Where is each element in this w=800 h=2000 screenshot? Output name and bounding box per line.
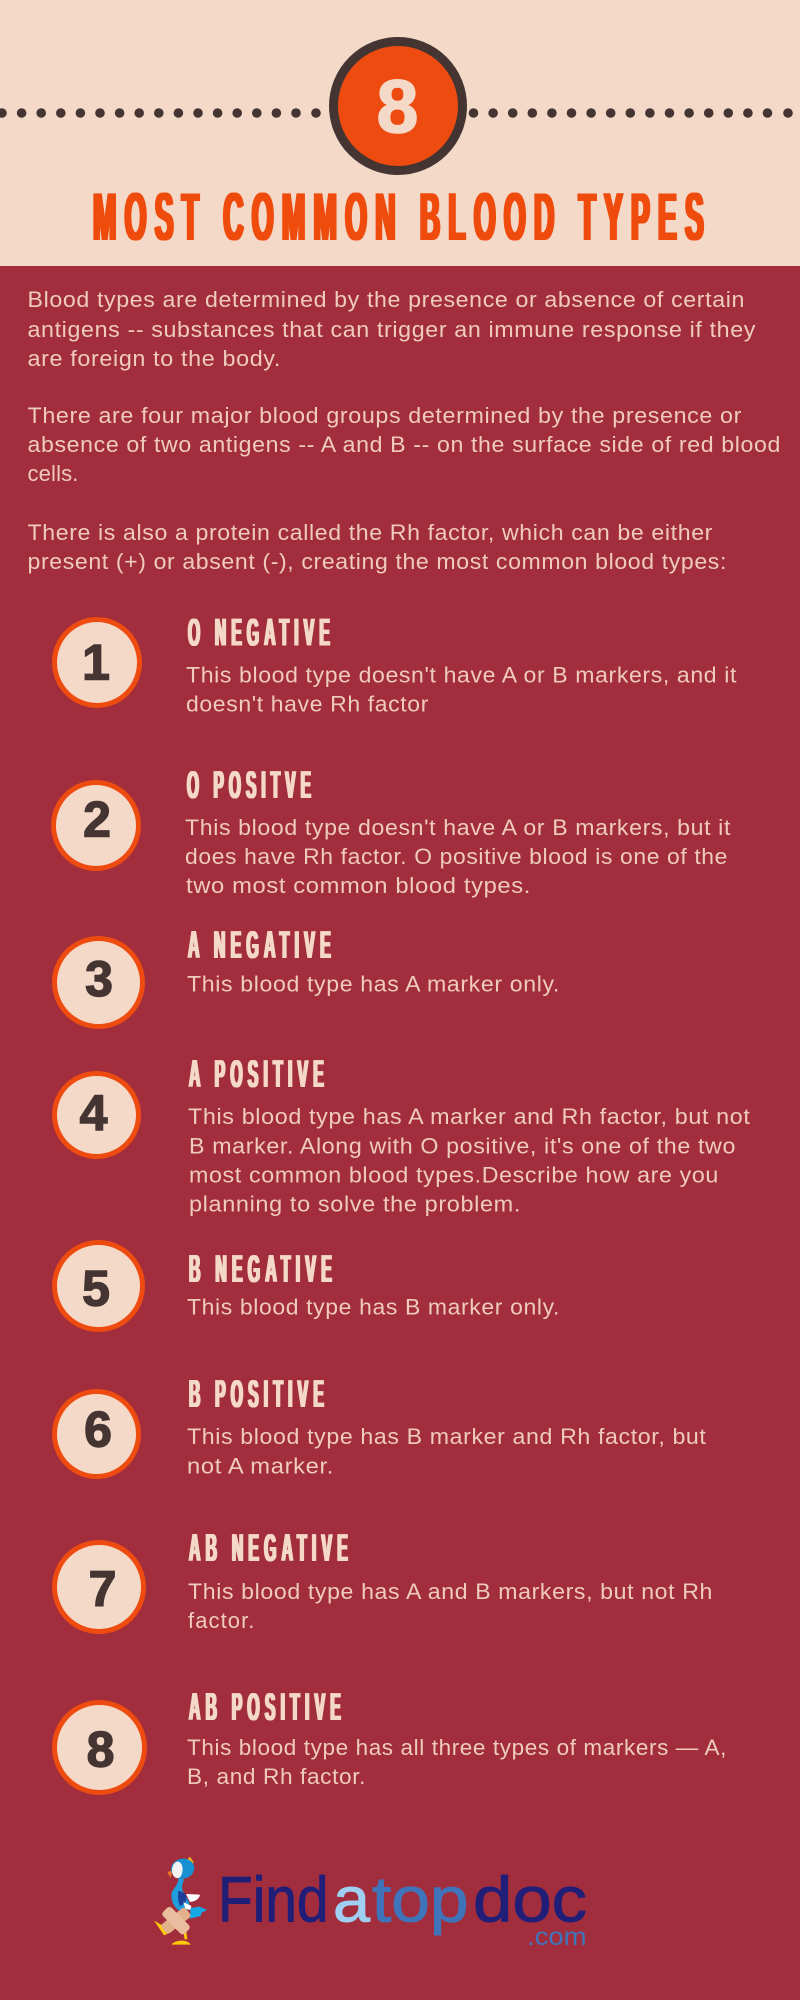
description: [185, 815, 731, 898]
wordmark: Find: [218, 1864, 328, 1936]
description: This blood type has A marker and Rh factor, but not: [188, 1104, 750, 1129]
text block: intro paragraph 2: cells.: [28, 461, 79, 486]
number badge 4: [54, 1074, 138, 1156]
text block: intro paragraph 2: [28, 403, 781, 486]
blood type 5: B negative: B NEGATIVE: [189, 1248, 337, 1291]
text block: intro paragraph 1: antigens -- substances that can trigger an immune response if they: [28, 317, 756, 342]
number badge 6: 6: [84, 1402, 112, 1458]
number badge 5: [54, 1242, 142, 1330]
blood type 7: AB negative: AB NEGATIVE: [189, 1527, 353, 1570]
description: This blood type doesn't have A or B markers, but it: [185, 815, 731, 840]
text block: intro paragraph 3: [28, 520, 727, 574]
description: This blood type has A and B markers, but not Rh: [188, 1579, 713, 1604]
number badge 4: 4: [80, 1085, 108, 1141]
blood type 7: AB negative: [54, 1527, 713, 1633]
blood type 1: O negative: [54, 612, 737, 716]
dotted line: right: [469, 108, 793, 118]
blood type 4: A positive: [54, 1053, 750, 1216]
number badge 2: 2: [83, 792, 111, 848]
description: [188, 1579, 713, 1633]
description: most common blood types.Describe how are you: [189, 1162, 719, 1188]
description: B marker. Along with O positive, it's one of the two: [189, 1134, 736, 1158]
description: not A marker.: [187, 1454, 334, 1478]
number badge 8: 8: [87, 1722, 114, 1778]
dotted line: left: [0, 108, 321, 118]
wordmark: doc: [473, 1864, 587, 1936]
badge: big number 8: 8: [377, 64, 418, 148]
blood type 6: B positive: [54, 1373, 706, 1478]
blood type 1: O negative: O NEGATIVE: [188, 612, 335, 654]
description: [187, 1424, 706, 1478]
text block: intro paragraph 2: absence of two antigens -- A and B -- on the surface side of red blood: [28, 432, 781, 457]
wordmark: [218, 1864, 587, 1951]
description: planning to solve the problem.: [189, 1192, 521, 1216]
description: factor.: [188, 1608, 255, 1633]
text block: intro paragraph 1: are foreign to the body.: [28, 346, 281, 371]
description: This blood type has all three types of markers — A,: [187, 1735, 727, 1760]
blood type 4: A positive: A POSITIVE: [189, 1053, 329, 1096]
text block: intro paragraph 3: There is also a protein called the Rh factor, which can be either: [28, 520, 713, 545]
number badge 2: [54, 782, 138, 868]
text block: intro paragraph 2: There are four major blood groups determined by the presence or: [28, 403, 742, 428]
blood type 8: AB positive: AB POSITIVE: [189, 1686, 346, 1729]
blood type 3: A negative: [54, 924, 560, 1026]
number badge 7: [54, 1542, 144, 1632]
wordmark: top: [372, 1864, 468, 1936]
badge: big number 8: [334, 42, 462, 170]
number badge 1: 1: [82, 634, 110, 690]
description: This blood type has A marker only.: [187, 972, 560, 996]
blood type 8: AB positive: [54, 1686, 727, 1792]
text block: intro paragraph 1: Blood types are determined by the presence or absence of certain: [28, 287, 745, 312]
number badge 7: 7: [89, 1561, 116, 1617]
description: two most common blood types.: [186, 873, 531, 898]
blood type 3: A negative: A NEGATIVE: [188, 924, 336, 967]
icon: duck mascot with bandage: [154, 1857, 207, 1945]
description: This blood type doesn't have A or B markers, and it: [186, 662, 737, 688]
wordmark: a: [333, 1864, 370, 1936]
blood type 6: B positive: B POSITIVE: [189, 1373, 329, 1416]
description: doesn't have Rh factor: [186, 692, 429, 716]
number badge 3: [54, 938, 142, 1026]
text block: intro paragraph 1: [28, 287, 756, 371]
wordmark: .com: [527, 1923, 586, 1951]
blood type 2: O positive: O POSITVE: [187, 764, 316, 807]
number badge 5: 5: [82, 1260, 110, 1316]
description: This blood type has B marker and Rh factor, but: [187, 1424, 706, 1449]
number badge 1: [54, 620, 140, 706]
description: does have Rh factor. O positive blood is one of the: [185, 844, 728, 869]
description: [187, 1735, 727, 1789]
description: B, and Rh factor.: [187, 1764, 366, 1789]
logo: Findatopdoc.com: [154, 1857, 587, 1951]
text block: intro paragraph 3: present (+) or absent (-), creating the most common blood types:: [28, 549, 727, 574]
blood type 5: B negative: [54, 1242, 560, 1330]
number badge 3: 3: [85, 951, 113, 1007]
blood type 2: O positive: [54, 764, 731, 898]
number badge 8: [54, 1702, 144, 1792]
description: [186, 662, 737, 716]
description: This blood type has B marker only.: [187, 1294, 560, 1320]
number badge 6: [54, 1392, 138, 1476]
panel: header background: [0, 0, 800, 266]
description: [188, 1104, 750, 1216]
